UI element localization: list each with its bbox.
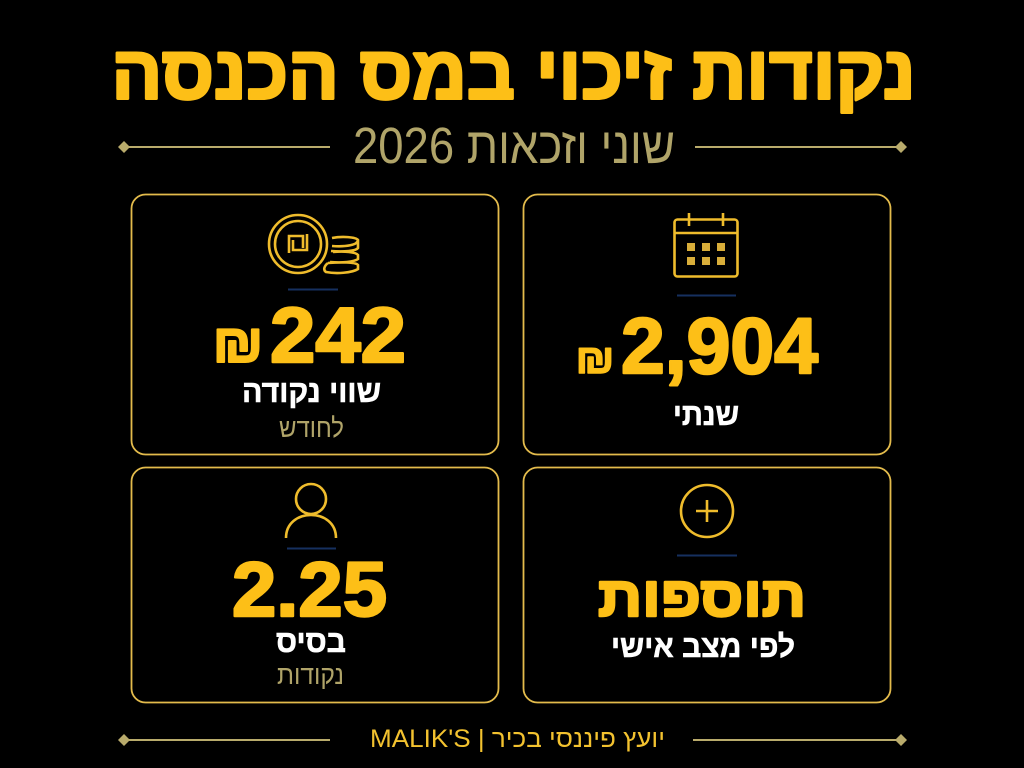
label: by personal situation: לפי מצב אישי [611, 629, 795, 664]
label: point value: שווי נקודה [242, 374, 381, 409]
footer: יועץ פיננסי בכיר | MALIK'S [370, 725, 665, 753]
icon: plus in circle [681, 485, 733, 537]
value: 242 shekels: 242 [270, 291, 406, 379]
subtitle row [118, 117, 907, 174]
icon: shekel coins [269, 215, 358, 273]
subtitle row: שוני וזכאות 2026 [353, 117, 675, 174]
icon: person [286, 484, 336, 538]
value: 2,904 shekels: ₪ [576, 336, 614, 382]
label: base: בסיס [276, 624, 346, 659]
label: per month: לחודש [279, 413, 344, 443]
label: annual: שנתי [673, 397, 739, 432]
panel: additions [524, 468, 890, 702]
icon: calendar [674, 213, 738, 276]
panel: monthly point value [132, 194, 498, 454]
panel: base points [132, 468, 498, 702]
panel: annual value [524, 194, 890, 454]
label: points: נקודות [277, 660, 344, 690]
value: 2,904 shekels: 2,904 [621, 301, 818, 390]
footer [118, 725, 907, 753]
value: 242 shekels [212, 291, 406, 379]
title: נקודות זיכוי במס הכנסה [112, 30, 916, 114]
value: 242 shekels: ₪ [212, 314, 264, 374]
value: 2.25: 2.25 [232, 547, 387, 633]
value: additions: תוספות [598, 565, 806, 628]
